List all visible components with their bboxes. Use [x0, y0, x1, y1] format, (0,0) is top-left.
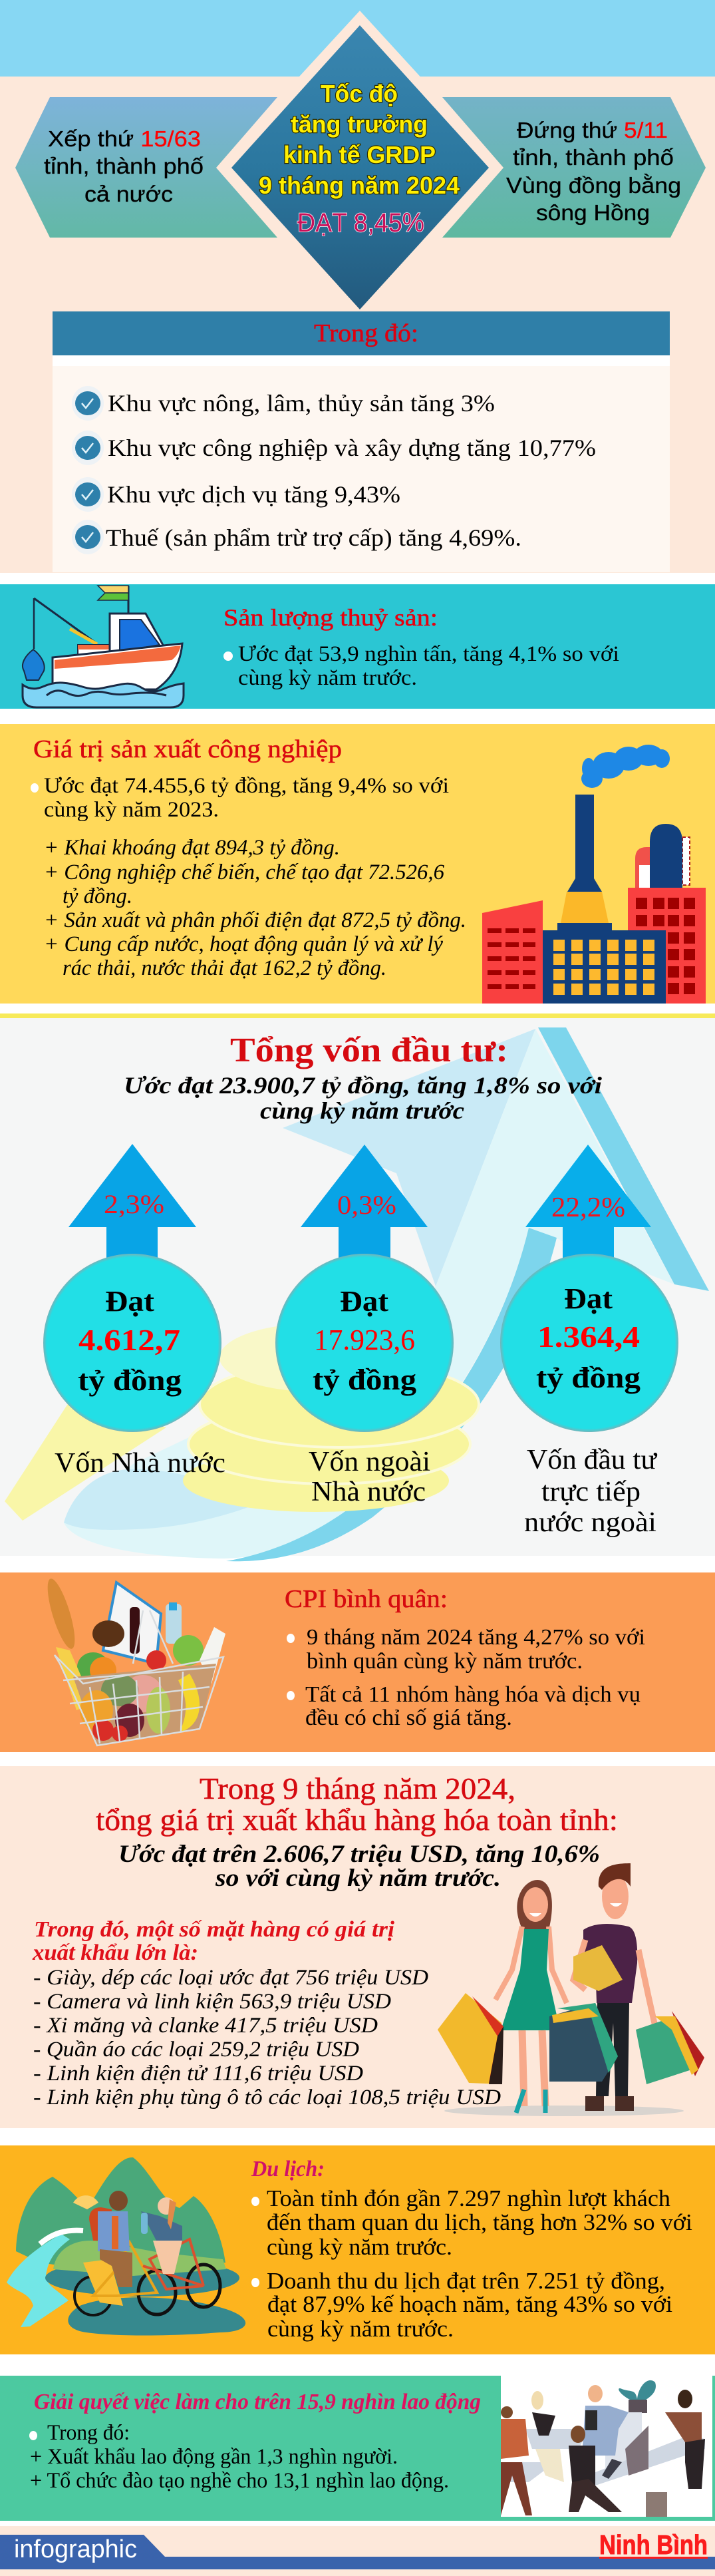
- center diamond: GRDP growth: kinh tế GRDP: [283, 141, 436, 168]
- check list: Khu vực nông, lâm, thủy sản tăng 3%: [108, 390, 495, 417]
- item: non-state capital: 0,3%: [337, 1190, 396, 1220]
- panel: fishery output: [0, 584, 715, 709]
- heading: fishery: Sản lượng thuỷ sản:: [223, 604, 438, 631]
- text block: fishery: Ước đạt 53,9 nghìn tấn, tăng 4,1% so với: [238, 642, 619, 666]
- text block: tourism: đến tham quan du lịch, tăng hơn 32% so với: [267, 2209, 692, 2235]
- subheading: main export items: [32, 1917, 395, 1965]
- text block: employment: + Xuất khẩu lao động gần 1,3 nghìn người.: [30, 2445, 398, 2469]
- right hexagon: regional rank: [442, 97, 706, 238]
- check list: [72, 386, 596, 554]
- text block: industry: tỷ đồng.: [63, 884, 132, 908]
- list: export items: - Giày, dép các loại ước đạt 756 triệu USD: [33, 1966, 428, 1990]
- subheading: exports: [118, 1841, 600, 1892]
- arrow: state capital growth: [69, 1144, 196, 1264]
- subheading: estimate: Ước đạt 23.900,7 tỷ đồng, tăng 1,8% so với: [124, 1072, 602, 1099]
- left hexagon: national rank: cả nước: [84, 182, 173, 206]
- item: foreign direct investment: 1.364,4: [537, 1320, 640, 1354]
- item: foreign direct investment: 22,2%: [551, 1193, 625, 1223]
- item: non-state capital: [275, 1145, 454, 1507]
- center diamond: GRDP growth: Tốc độ: [321, 80, 398, 107]
- item: state capital: tỷ đồng: [78, 1364, 182, 1397]
- left hexagon: national rank: tỉnh, thành phố: [44, 154, 204, 178]
- item: non-state capital: 17.923,6: [314, 1324, 415, 1356]
- item: non-state capital: Vốn ngoài: [309, 1447, 430, 1477]
- list: export items: - Quần áo các loại 259,2 triệu USD: [33, 2038, 359, 2062]
- icon: office team: [501, 2376, 715, 2521]
- icon: cyclists in mountains: [7, 2157, 245, 2336]
- panel: CPI: [0, 1572, 715, 1752]
- heading: industry: Giá trị sản xuất công nghiệp: [33, 735, 342, 763]
- list: export items: [33, 1966, 501, 2110]
- icon: fishing boat: [23, 586, 184, 707]
- heading: exports: Trong 9 tháng năm 2024,: [200, 1771, 515, 1805]
- panel: exports: [0, 1766, 715, 2128]
- text block: CPI: [287, 1625, 645, 1730]
- footer: [0, 2526, 715, 2576]
- text block: tourism: cùng kỳ năm trước.: [267, 2316, 454, 2342]
- text block: industry: cùng kỳ năm 2023.: [44, 798, 219, 822]
- footer label: infographic: infographic: [14, 2535, 137, 2563]
- text block: industry: + Cung cấp nước, hoạt động quản lý và xử lý: [44, 932, 443, 956]
- text block: tourism: đạt 87,9% kế hoạch năm, tăng 43% so với: [267, 2291, 672, 2317]
- item: foreign direct investment: trực tiếp: [541, 1477, 641, 1507]
- panel: total investment: [0, 1013, 715, 1561]
- item: foreign direct investment: tỷ đồng: [536, 1362, 641, 1394]
- item: state capital: Đạt: [105, 1285, 154, 1318]
- center diamond: GRDP growth: [231, 25, 489, 309]
- left hexagon: national rank: [15, 97, 277, 238]
- text block: tourism: Doanh thu du lịch đạt trên 7.251 tỷ đồng,: [267, 2268, 665, 2294]
- center diamond: GRDP growth: tăng trưởng: [291, 110, 428, 138]
- heading: total investment: Tổng vốn đầu tư:: [230, 1031, 508, 1069]
- item: non-state capital: Đạt: [340, 1285, 388, 1318]
- subheading: estimate: cùng kỳ năm trước: [260, 1097, 464, 1124]
- right hexagon: regional rank: sông Hồng: [536, 200, 650, 225]
- item: foreign direct investment: [500, 1145, 678, 1538]
- background arrow illustration: [5, 1027, 709, 1561]
- icon: grocery basket: [42, 1576, 225, 1746]
- text block: tourism: cùng kỳ năm trước.: [267, 2234, 452, 2260]
- list: export items: - Linh kiện phụ tùng ô tô các loại 108,5 triệu USD: [33, 2086, 501, 2110]
- right hexagon: regional rank: Vùng đồng bằng: [506, 173, 681, 198]
- text block: employment: Trong đó:: [47, 2421, 130, 2445]
- heading: CPI: CPI bình quân:: [285, 1585, 448, 1613]
- text block: tourism: [251, 2185, 692, 2342]
- text block: industry: rác thải, nước thải đạt 162,2 tỷ đồng.: [63, 956, 386, 980]
- text block: CPI: bình quân cùng kỳ năm trước.: [307, 1649, 583, 1674]
- panel: industrial output: [0, 724, 715, 1004]
- subheading: main export items: Trong đó, một số mặt hàng có giá trị: [34, 1917, 395, 1942]
- text block: industry: [31, 774, 466, 980]
- left hexagon: national rank: Xếp thứ 15/63: [48, 126, 201, 151]
- arrow: non-state capital growth: [301, 1145, 428, 1264]
- item: state capital: 2,3%: [104, 1189, 164, 1219]
- icon: factory: [482, 745, 706, 1004]
- list: export items: - Xi măng và clanke 417,5 triệu USD: [33, 2014, 378, 2038]
- subheading: main export items: xuất khẩu lớn là:: [32, 1940, 198, 1965]
- text block: fishery: [223, 642, 619, 690]
- heading: of which: Trong đó:: [314, 319, 418, 347]
- text block: CPI: 9 tháng năm 2024 tăng 4,27% so với: [307, 1625, 645, 1650]
- right hexagon: regional rank: Đứng thứ 5/11: [517, 118, 668, 142]
- item: foreign direct investment: nước ngoài: [524, 1507, 656, 1538]
- subheading: estimate: [124, 1072, 602, 1124]
- item: state capital: [43, 1144, 225, 1479]
- item: non-state capital: tỷ đồng: [313, 1364, 416, 1396]
- panel: sector breakdown: [53, 311, 670, 572]
- heading: exports: tổng giá trị xuất khẩu hàng hóa toàn tỉnh:: [96, 1803, 618, 1837]
- text block: industry: + Sản xuất và phân phối điện đạt 872,5 tỷ đồng.: [44, 908, 466, 932]
- item: state capital: 4.612,7: [78, 1323, 180, 1357]
- text block: tourism: Toàn tỉnh đón gần 7.297 nghìn lượt khách: [267, 2185, 671, 2211]
- text block: CPI: Tất cả 11 nhóm hàng hóa và dịch vụ: [305, 1682, 641, 1707]
- text block: employment: + Tổ chức đào tạo nghề cho 13,1 nghìn lao động.: [30, 2469, 449, 2493]
- check list: Khu vực dịch vụ tăng 9,43%: [107, 481, 400, 508]
- text block: industry: + Công nghiệp chế biến, chế tạo đạt 72.526,6: [44, 860, 444, 884]
- text block: industry: + Khai khoáng đạt 894,3 tỷ đồng.: [44, 836, 340, 860]
- center diamond: GRDP growth: 9 tháng năm 2024: [259, 172, 460, 199]
- panel: employment: [0, 2376, 715, 2521]
- icon: shoppers: [438, 1863, 704, 2116]
- check list: Khu vực công nghiệp và xây dựng tăng 10,77%: [108, 435, 596, 461]
- arrow: FDI growth: [525, 1145, 651, 1264]
- item: state capital: Vốn Nhà nước: [55, 1448, 225, 1479]
- item: non-state capital: Nhà nước: [311, 1477, 426, 1507]
- item: foreign direct investment: Vốn đầu tư: [527, 1445, 657, 1475]
- text block: employment: [29, 2421, 449, 2493]
- check list: Thuế (sản phẩm trừ trợ cấp) tăng 4,69%.: [106, 524, 521, 551]
- heading: employment: Giải quyết việc làm cho trên 15,9 nghìn lao động: [34, 2390, 481, 2414]
- text block: industry: Ước đạt 74.455,6 tỷ đồng, tăng 9,4% so với: [44, 774, 449, 798]
- subheading: exports: so với cùng kỳ năm trước.: [215, 1865, 501, 1892]
- heading: exports: [96, 1771, 618, 1837]
- list: export items: - Camera và linh kiện 563,9 triệu USD: [33, 1990, 391, 2014]
- panel: tourism: [0, 2145, 715, 2354]
- item: foreign direct investment: Đạt: [564, 1282, 613, 1315]
- subheading: exports: Ước đạt trên 2.606,7 triệu USD, tăng 10,6%: [118, 1841, 600, 1868]
- text block: fishery: cùng kỳ năm trước.: [238, 666, 417, 690]
- text block: CPI: đều có chỉ số giá tăng.: [305, 1706, 512, 1730]
- list: export items: - Linh kiện điện tử 111,6 triệu USD: [33, 2062, 363, 2086]
- right hexagon: regional rank: tỉnh, thành phố: [513, 145, 674, 170]
- heading: tourism: Du lịch:: [251, 2157, 325, 2181]
- center diamond: GRDP growth: ĐẠT 8,45%: [297, 208, 424, 238]
- header panel: [0, 0, 715, 573]
